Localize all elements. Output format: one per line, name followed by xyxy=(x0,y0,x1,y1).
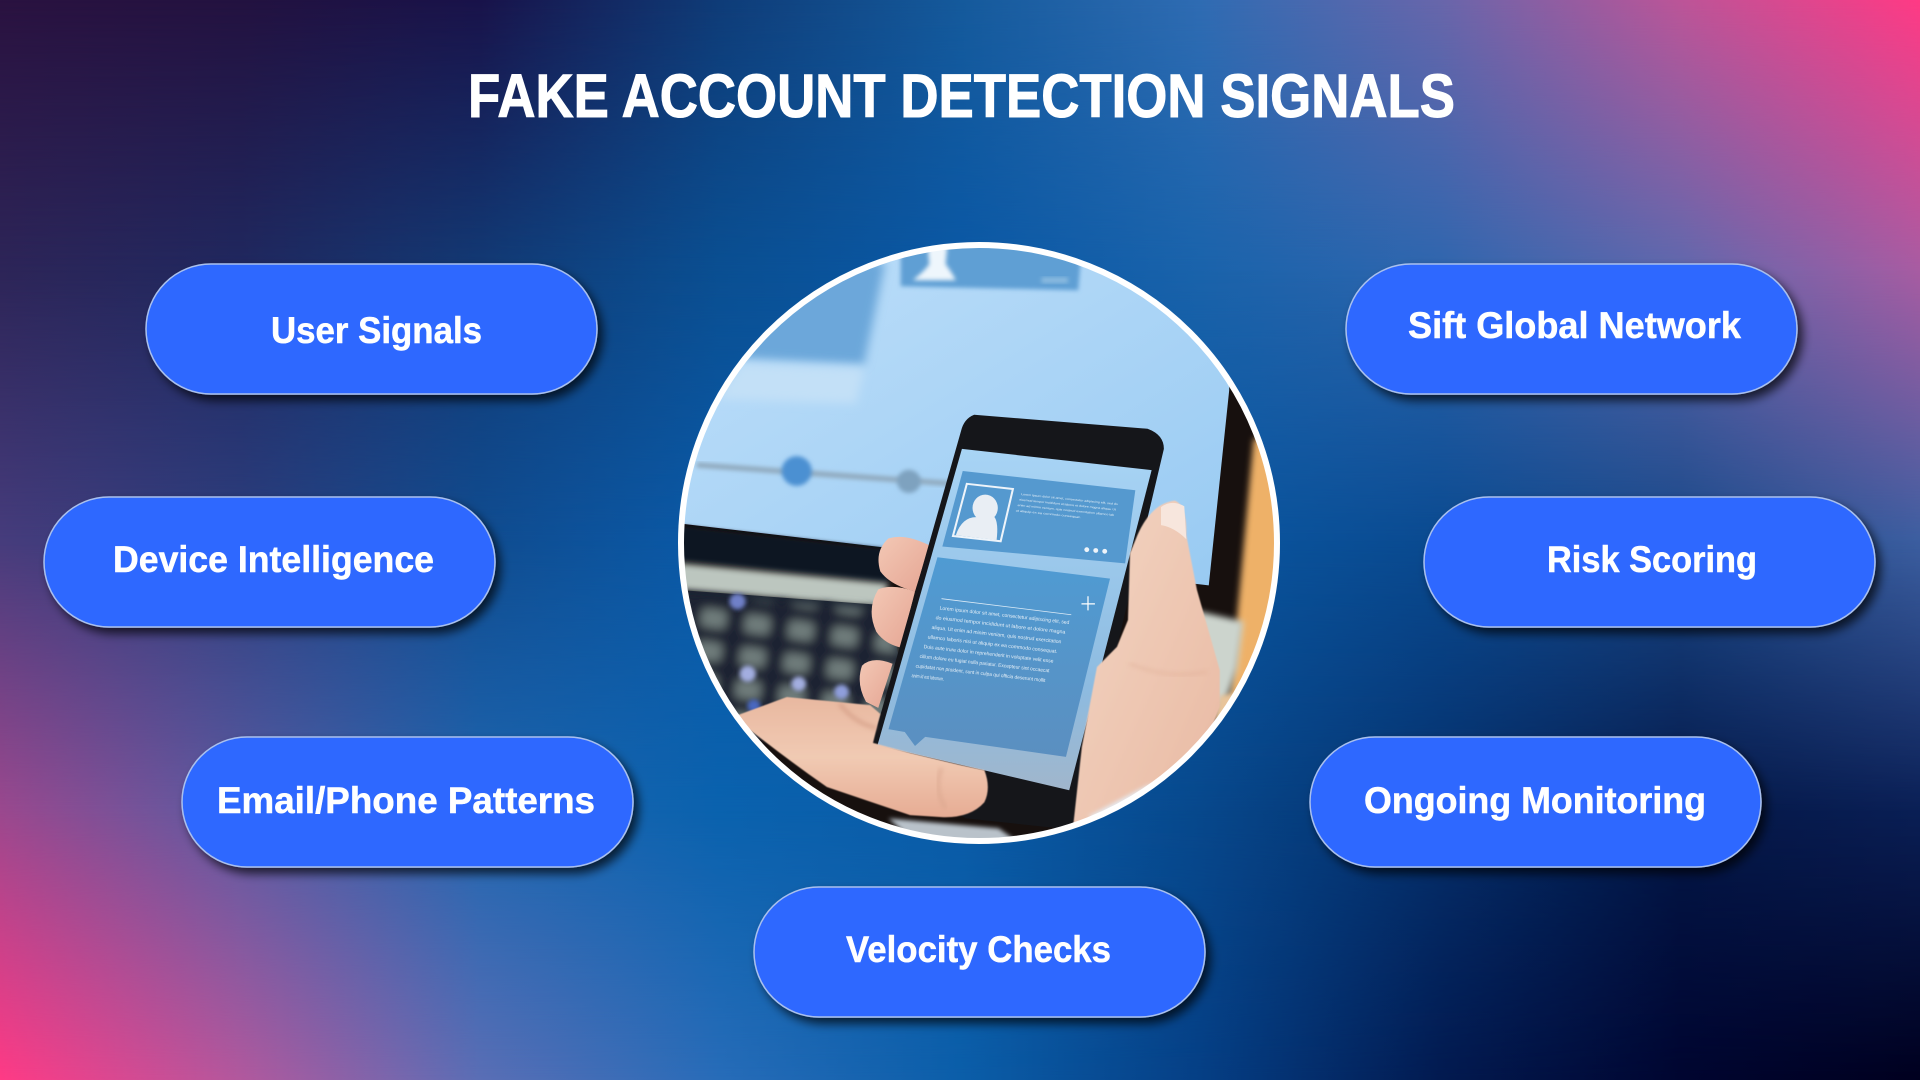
phone screen xyxy=(877,449,1152,790)
pill: Velocity Checks: Velocity Checks xyxy=(846,929,1111,970)
profile card: ut aliquip ex ea commodo consequat. xyxy=(1016,508,1081,519)
profile card: enim ad minim veniam, quis nostrud exercitation ullamco lab xyxy=(1017,503,1115,517)
pill: User Signals: User Signals xyxy=(271,310,482,351)
pill: User Signals xyxy=(146,264,597,394)
pill: Risk Scoring: Risk Scoring xyxy=(1547,539,1757,580)
right background: wall and laptop edge xyxy=(1202,434,1274,722)
phone body xyxy=(872,415,1164,828)
message card: ullamco laboris nisi ut aliquip ex ea commodo consequat. xyxy=(927,635,1058,655)
profile card: eiusmod tempor incididunt ut labore et dolore magna aliqua. Ut xyxy=(1019,498,1116,512)
message card: anim id est laborum. xyxy=(911,673,944,683)
left hand with thumb xyxy=(733,697,988,817)
pill: Device Intelligence: Device Intelligence xyxy=(113,539,434,580)
message card: aliqua. Ut enim ad minim veniam, quis nostrud exercitation xyxy=(931,625,1062,645)
profile card xyxy=(942,471,1135,563)
pill: Risk Scoring xyxy=(1424,497,1875,627)
message card: do eiusmod tempor incididunt ut labore et dolore magna xyxy=(935,615,1066,636)
pill: Velocity Checks xyxy=(754,887,1205,1017)
pill: Ongoing Monitoring: Ongoing Monitoring xyxy=(1364,780,1706,821)
central photo: hand holding phone xyxy=(678,242,1280,844)
message card: Lorem ipsum dolor sit amet, consectetur adipiscing elit, sed xyxy=(939,606,1070,626)
laptop and keyboard xyxy=(684,523,900,742)
fingers behind phone xyxy=(860,537,929,708)
pill: Email/Phone Patterns xyxy=(182,737,633,867)
photo backdrop and monitor screen xyxy=(684,248,1258,837)
profile card: Lorem ipsum dolor sit amet, consectetur adipiscing elit, sed do xyxy=(1021,492,1118,506)
silver laptop edge below hand xyxy=(887,816,1014,838)
message card: cupidatat non proident, sunt in culpa qui officia deserunt mollit xyxy=(915,664,1046,684)
photo white ring xyxy=(681,245,1277,841)
pill: Sift Global Network: Sift Global Network xyxy=(1408,305,1741,346)
right hand with thumb xyxy=(1073,501,1220,832)
title: FAKE ACCOUNT DETECTION SIGNALS xyxy=(468,62,1455,130)
message card xyxy=(888,557,1110,757)
pill: Ongoing Monitoring xyxy=(1310,737,1761,867)
message card: Duis aute irure dolor in reprehenderit in voluptate velit esse xyxy=(923,644,1054,665)
pill: Sift Global Network xyxy=(1346,264,1797,394)
message card: cillum dolore eu fugiat nulla pariatur. Excepteur sint occaecat xyxy=(919,654,1050,674)
pill: Device Intelligence xyxy=(44,497,495,627)
pill: Email/Phone Patterns: Email/Phone Patterns xyxy=(217,780,595,821)
